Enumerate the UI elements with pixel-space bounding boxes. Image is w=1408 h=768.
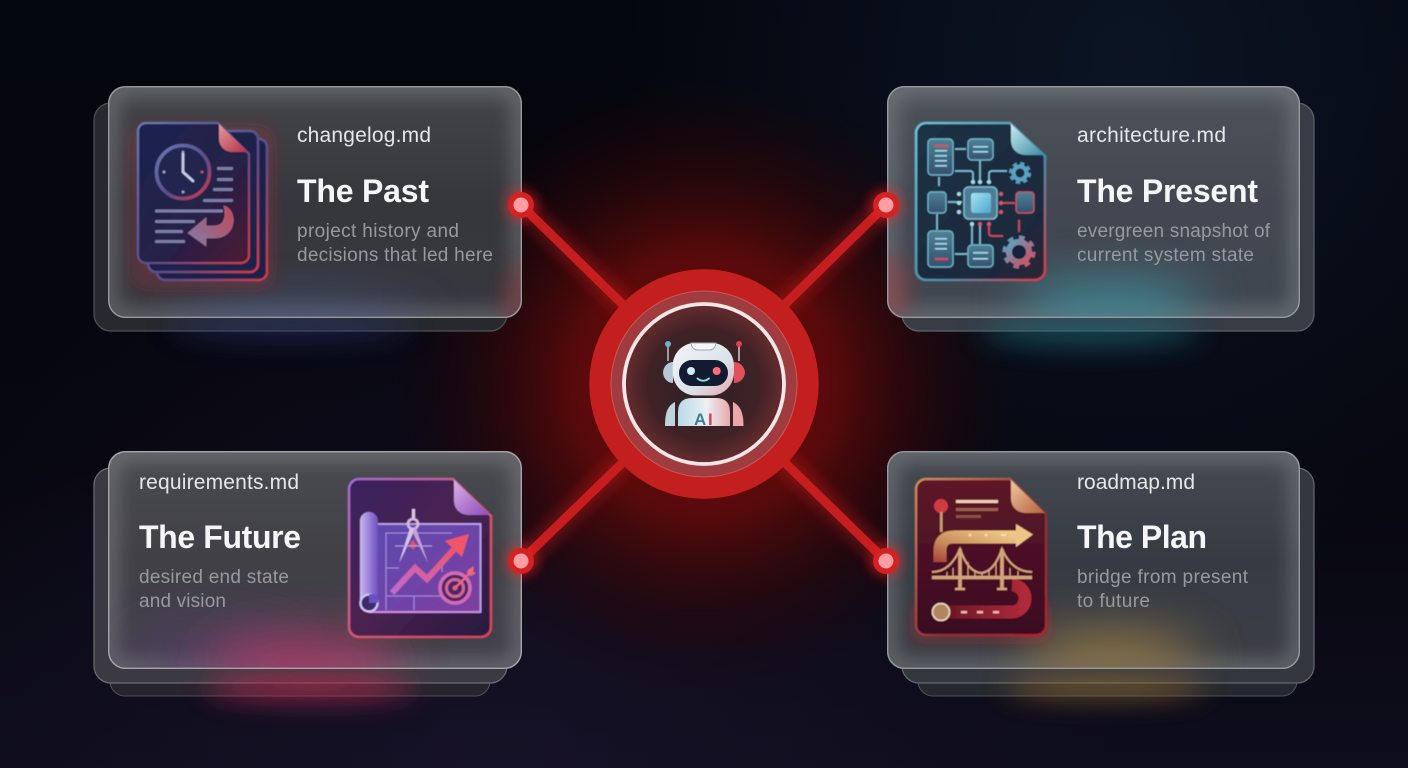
description: [1077, 221, 1271, 266]
description: and vision: [139, 591, 226, 612]
connector lines: [521, 205, 887, 561]
icon: AI robot: [663, 341, 745, 429]
card: The Plan: [887, 451, 1314, 697]
description: bridge from present: [1077, 567, 1249, 588]
card: The Future: [94, 451, 522, 698]
connector node: The Future: [505, 545, 537, 577]
heading: The Future: [139, 519, 301, 555]
heading: The Present: [1077, 173, 1258, 209]
icon: blueprint with compass, growth arrow and target: [349, 479, 491, 637]
filename: roadmap.md: [1077, 471, 1195, 494]
description: project history and: [297, 221, 459, 242]
card: The Past: [94, 86, 560, 345]
icon: AI robot: A: [694, 410, 706, 429]
filename: changelog.md: [297, 124, 431, 147]
description: current system state: [1077, 245, 1254, 266]
icon: architecture diagram document: [916, 123, 1045, 280]
description: to future: [1077, 591, 1150, 612]
description: desired end state: [139, 567, 289, 588]
icon: AI robot: I: [708, 410, 713, 429]
description: decisions that led here: [297, 245, 493, 266]
connector node: The Present: [870, 189, 902, 221]
connector node: The Plan: [870, 545, 902, 577]
heading: The Past: [297, 173, 429, 209]
card: The Present: [857, 86, 1314, 344]
connector node: The Past: [505, 189, 537, 221]
description: evergreen snapshot of: [1077, 221, 1271, 242]
filename: architecture.md: [1077, 124, 1226, 147]
description: [139, 567, 289, 612]
description: [297, 221, 493, 266]
description: [1077, 567, 1249, 612]
icon: changelog document stack with clock: [130, 123, 275, 290]
heading: The Plan: [1077, 519, 1207, 555]
central hub: [589, 269, 819, 499]
filename: requirements.md: [139, 471, 299, 494]
icon: roadmap document with bridge: [912, 479, 1050, 642]
